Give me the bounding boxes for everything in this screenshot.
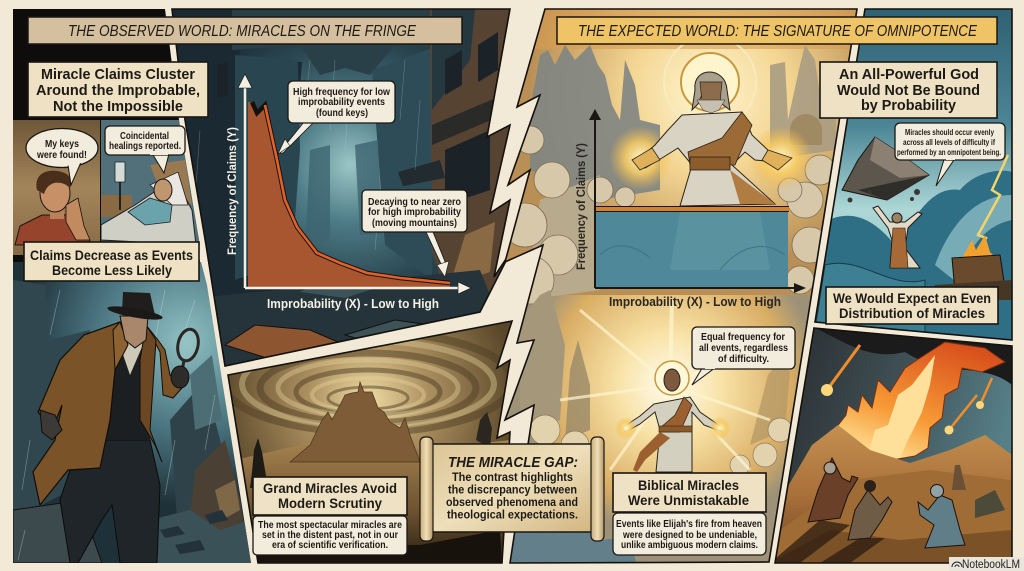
callout: high frequency: (found keys) [316, 108, 368, 119]
figure: radiant central figure [609, 36, 813, 206]
callout: decaying to near zero: (moving mountains) [372, 218, 457, 229]
text block: spectacular miracles: The most spectacular miracles are [258, 520, 402, 531]
box: claims decrease [24, 242, 199, 281]
box: miracle claims cluster [28, 62, 208, 117]
scroll body: the discrepancy between [448, 482, 577, 496]
axis label y: Frequency of Claims (Y) [225, 127, 239, 255]
dunes [782, 425, 1012, 529]
box: claims decrease: Become Less Likely [52, 262, 172, 278]
text block: elijah [613, 513, 766, 555]
left scroll roller [420, 437, 433, 541]
banner: observed world [28, 17, 462, 44]
axis label y: Frequency of Claims (Y) [574, 143, 588, 270]
box: miracle claims cluster: Not the Impossible [53, 98, 183, 115]
box: biblical miracles: Biblical Miracles [638, 477, 739, 493]
callout: high frequency: improbability events [298, 97, 385, 108]
box: claims decrease: Claims Decrease as Events [30, 247, 193, 263]
callout: equal frequency: Equal frequency for [701, 332, 785, 343]
callout: decaying to near zero [362, 190, 467, 277]
box: all-powerful god [820, 62, 997, 118]
banner: observed world: THE OBSERVED WORLD: MIRACLES ON THE FRINGE [68, 23, 417, 40]
panel: rainy alley with decay chart [165, 0, 515, 370]
bubble: coincidental healings: Coincidental [120, 131, 169, 142]
flying rock [842, 137, 929, 200]
callout: high frequency [278, 81, 395, 154]
black panel backing [13, 9, 200, 262]
bubble: coincidental healings [105, 126, 185, 173]
panel: detective in the rain [13, 262, 253, 563]
chart: orange decay curve [248, 102, 450, 288]
text block: spectacular miracles [253, 516, 407, 555]
box: all-powerful god: An All-Powerful God [839, 66, 979, 83]
box: miracle claims cluster: Miracle Claims Cluster [41, 66, 195, 83]
banner: expected world: THE EXPECTED WORLD: THE SIGNATURE OF OMNIPOTENCE [578, 23, 978, 40]
box: grand miracles [253, 477, 407, 515]
text block: elijah: Events like Elijah's fire from heaven [616, 519, 762, 530]
scroll body [446, 470, 578, 522]
panel: hospital patient [100, 120, 200, 245]
axis label x: Improbability (X) - Low to High [609, 295, 781, 309]
light rays [560, 300, 770, 470]
box: grand miracles: Grand Miracles Avoid [263, 480, 397, 496]
face [120, 316, 148, 348]
callout: equal frequency: of difficulty. [718, 354, 769, 365]
flames [836, 342, 1005, 462]
scroll body: observed phenomena and [446, 495, 578, 509]
alley scene [165, 0, 515, 370]
scroll body: theological expectations. [447, 508, 578, 522]
text block: spectacular miracles: era of scientific verification. [272, 540, 388, 551]
kneeling figures [808, 458, 858, 522]
scroll: the miracle gap [420, 437, 604, 541]
lightning bolt [978, 155, 1008, 252]
panel: fire from heaven [770, 325, 1015, 565]
scroll heading: THE MIRACLE GAP: [448, 454, 578, 471]
clouds [503, 126, 835, 304]
right scroll roller [591, 437, 604, 541]
box: biblical miracles: Were Unmistakable [628, 492, 749, 508]
box: all-powerful god: Would Not Be Bound [837, 82, 980, 99]
callout: miracles should occur evenly [895, 123, 1005, 186]
callout: decaying to near zero: for high improbability [368, 207, 461, 218]
panel: observed world upper left [13, 9, 200, 262]
trench coat [33, 322, 120, 505]
callout: miracles should occur evenly: across all levels of difficulty if [903, 137, 995, 147]
scroll body: The contrast highlights [452, 470, 573, 484]
box: even distribution: Distribution of Miracles [839, 305, 985, 321]
meteors [821, 345, 992, 434]
box: even distribution [826, 287, 998, 324]
box: all-powerful god: by Probability [861, 97, 957, 114]
panel: man who found keys [13, 120, 100, 255]
text block: spectacular miracles: set in the distent past, not in our [262, 530, 398, 541]
box: grand miracles: Modern Scrutiny [278, 495, 382, 511]
lower tower left [528, 290, 565, 422]
vest and shirt [106, 347, 150, 440]
box: biblical miracles [613, 473, 766, 512]
panel: sea, flying rock and altar [810, 9, 1015, 344]
right towers [770, 45, 838, 160]
axis label x: Improbability (X) - Low to High [267, 297, 439, 311]
left towers [530, 45, 660, 200]
raised-arm figure [873, 206, 922, 268]
fedora [107, 292, 163, 322]
panel: expected world central radiance [489, 0, 860, 571]
text block: elijah: unlike ambiguous modern claims. [621, 540, 758, 551]
panel: swirling sky and distant city [223, 318, 515, 570]
chart axes [238, 74, 471, 294]
callout: equal frequency: all events, regardless [699, 343, 788, 354]
figure: lower radiant figure [615, 361, 731, 472]
chart axes [589, 109, 806, 293]
text block: elijah: were designed to be undeniable, [622, 530, 757, 541]
callout: high frequency: High frequency for low [293, 87, 390, 98]
box: even distribution: We Would Expect an Even [833, 290, 991, 306]
legs [60, 440, 160, 563]
bubble: coincidental healings: healings reported. [109, 141, 181, 152]
chart: flat even frequency [596, 206, 789, 287]
altar with flame [962, 235, 993, 257]
magnifying glass [171, 327, 201, 388]
callout: equal frequency [692, 327, 795, 385]
callout: miracles should occur evenly: Miracles should occur evenly [905, 127, 994, 137]
lower blue clouds [511, 532, 636, 562]
bubble: my keys: My keys [45, 138, 79, 150]
box: miracle claims cluster: Around the Improbable, [36, 82, 200, 99]
banner: expected world [557, 17, 997, 44]
callout: decaying to near zero: Decaying to near zero [368, 197, 461, 208]
bubble: my keys: were found! [36, 149, 87, 161]
bubble: my keys [26, 128, 98, 185]
